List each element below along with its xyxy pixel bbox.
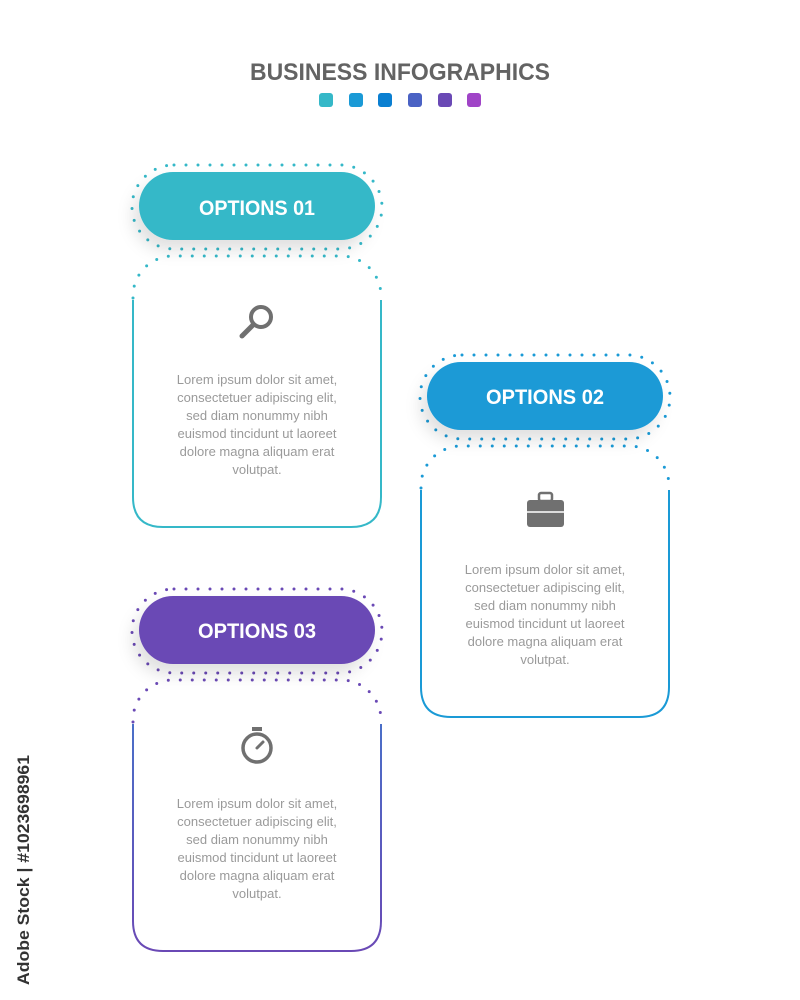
text block: volutpat. [232,462,282,477]
text block [465,562,625,667]
panel: options 01 [132,165,382,527]
text block: consectetuer adipiscing elit, [177,814,337,829]
pill heading [427,362,663,430]
text block: dolore magna aliquam erat [180,444,335,459]
icon: stopwatch [243,727,271,762]
title [250,59,550,107]
pill heading [139,596,375,664]
pill heading [139,172,375,240]
panel: options 02 [420,355,670,717]
color dots [319,93,481,107]
panel: options 02: OPTIONS 02 [486,386,604,409]
icon: briefcase [527,493,564,527]
text block: consectetuer adipiscing elit, [177,390,337,405]
panel: options 03 [132,589,382,951]
text block: euismod tincidunt ut laoreet [178,426,337,441]
text block: Lorem ipsum dolor sit amet, [465,562,625,577]
text block: consectetuer adipiscing elit, [465,580,625,595]
text block: dolore magna aliquam erat [468,634,623,649]
text block: sed diam nonummy nibh [186,408,328,423]
panel: options 01: OPTIONS 01 [199,197,315,220]
watermark text: Adobe Stock | #1023698961 [14,755,33,985]
panel: options 03: OPTIONS 03 [198,620,316,643]
text block: sed diam nonummy nibh [186,832,328,847]
text block: sed diam nonummy nibh [474,598,616,613]
text block: euismod tincidunt ut laoreet [178,850,337,865]
icon: magnifier [242,307,271,336]
text block: Lorem ipsum dolor sit amet, [177,372,337,387]
text block: volutpat. [520,652,570,667]
text block: euismod tincidunt ut laoreet [466,616,625,631]
text block: volutpat. [232,886,282,901]
title: BUSINESS INFOGRAPHICS [250,59,550,86]
text block [177,796,337,901]
text block: dolore magna aliquam erat [180,868,335,883]
text block: Lorem ipsum dolor sit amet, [177,796,337,811]
text block [177,372,337,477]
